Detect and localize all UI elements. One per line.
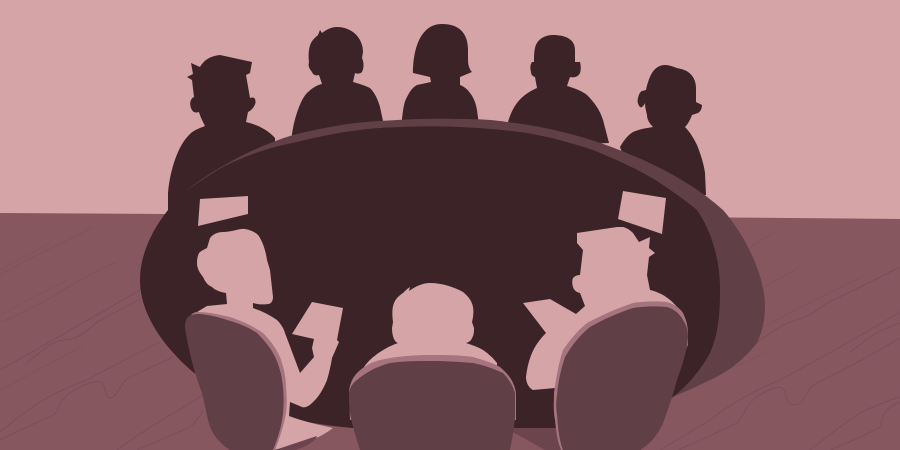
floor shadow under figure <box>275 436 317 450</box>
note card above left person <box>198 196 248 226</box>
person: back row centre with bob hair <box>402 24 479 125</box>
table rim and right side <box>187 119 765 450</box>
figure with held paper <box>190 229 343 450</box>
wall <box>0 0 900 225</box>
person: far left with quiff <box>168 55 275 220</box>
chair edge <box>186 312 287 450</box>
chair back <box>556 306 688 450</box>
shadow below table <box>505 424 560 450</box>
person: front centre with chair <box>349 283 516 450</box>
person: back row fourth <box>508 35 609 145</box>
note card above right person <box>618 191 666 234</box>
floor with wood grain <box>0 213 900 450</box>
person: front right with chair <box>523 227 688 450</box>
figure with held paper <box>523 227 677 400</box>
person: far right <box>620 65 706 200</box>
chair edge <box>349 355 516 420</box>
figure <box>364 283 497 380</box>
person: back row second <box>292 27 383 140</box>
chair edge <box>554 301 688 450</box>
person: front left with chair <box>185 229 343 450</box>
chair back <box>185 314 284 450</box>
chair back <box>349 361 515 450</box>
table top <box>140 126 720 428</box>
